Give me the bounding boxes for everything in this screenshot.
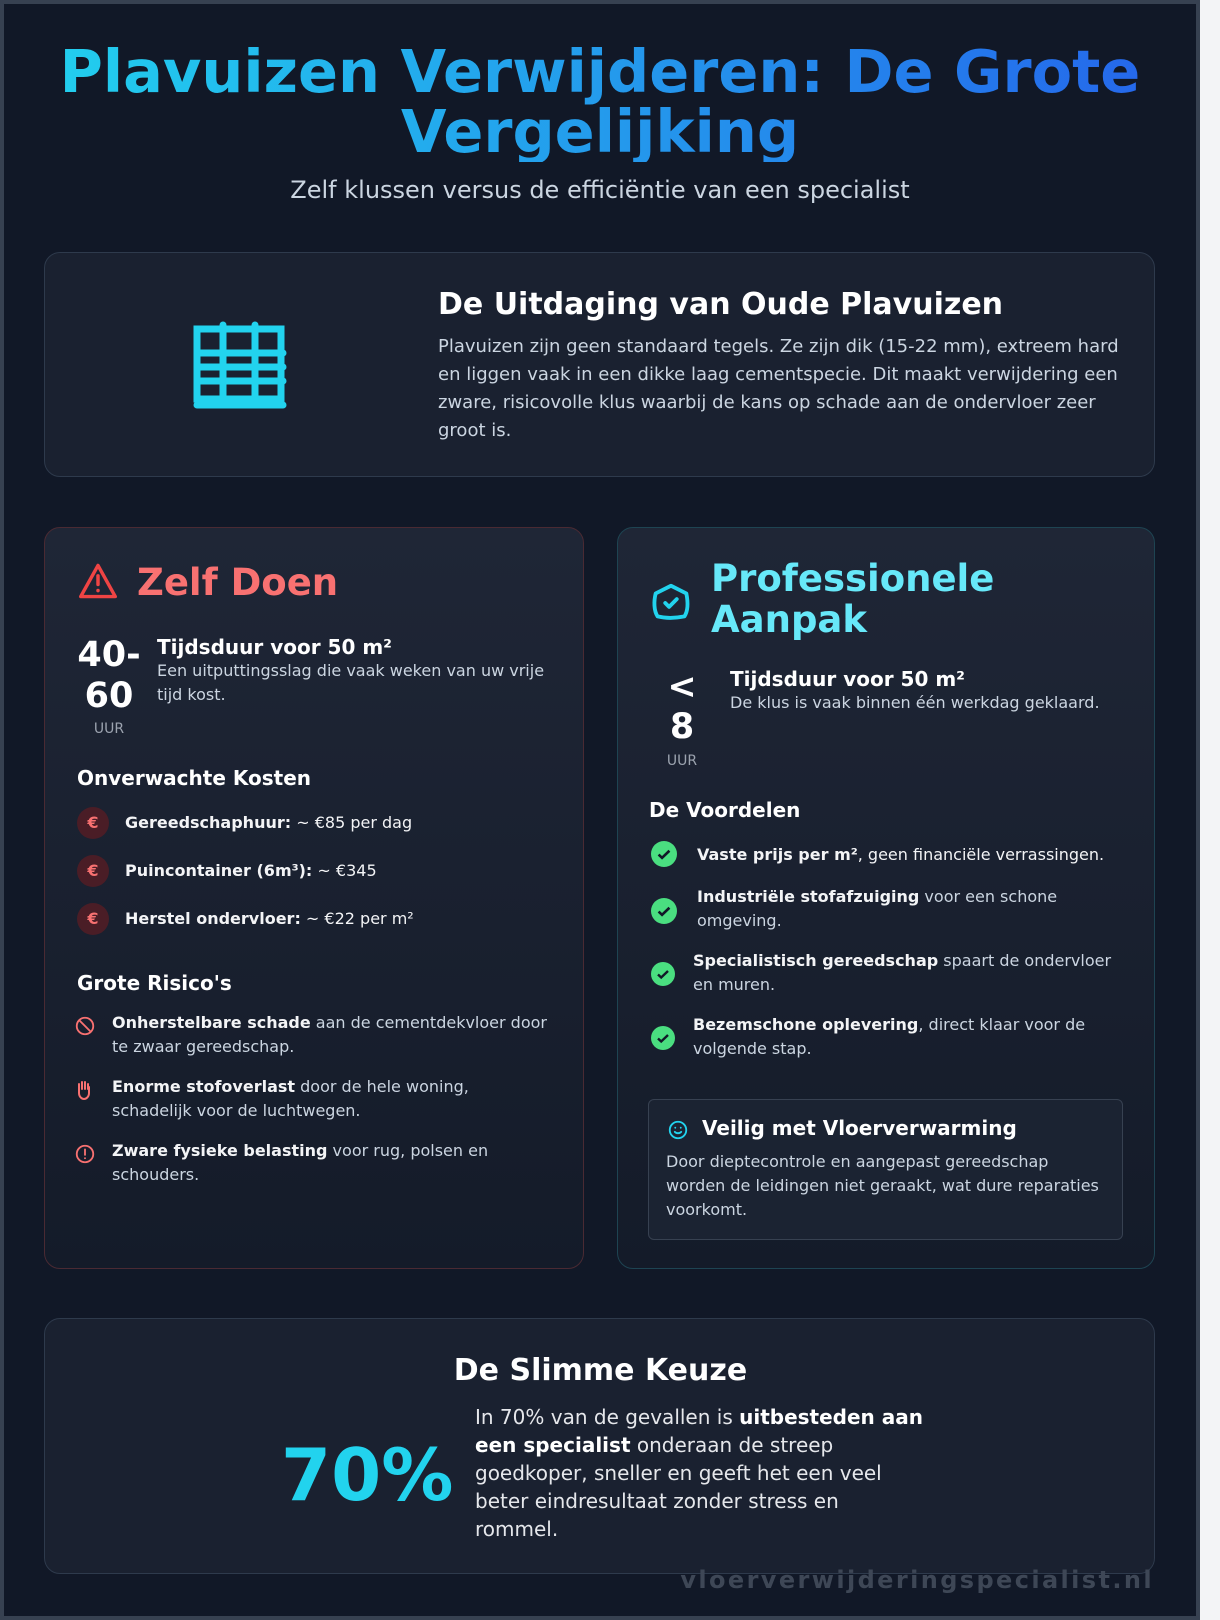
heading: intro: De Uitdaging van Oude Plavuizen <box>438 287 1003 322</box>
list: kosten: € <box>87 813 99 832</box>
subtitle: Zelf klussen versus de efficiëntie van een specialist <box>290 176 910 204</box>
text: intro: Plavuizen zijn geen standaard tegels. Ze zijn dik (15-22 mm), extreem hard en liggen vaak in een dikke laag cementspecie. Dit maakt verwijdering een zware, risicovolle klus waarbij de kans op schade aan de ondervloer zeer groot is. <box>438 336 1119 441</box>
panel: zelf doen <box>44 527 584 1269</box>
heading: professioneel: Professionele <box>711 557 994 600</box>
icon: warning <box>79 564 118 598</box>
title: Vergelijking <box>401 97 799 166</box>
list: voordelen: Specialistisch gereedschap spaart de ondervloer en muren. <box>693 951 1111 994</box>
stat: 40-60 uur <box>77 635 141 737</box>
panel: intro <box>44 252 1155 477</box>
panel: professioneel <box>617 527 1155 1269</box>
text: tijdsduur: Een uitputtingsslag die vaak weken van uw vrije tijd kost. <box>157 661 544 704</box>
list: kosten: Gereedschaphuur: ~ €85 per dag <box>125 813 412 832</box>
stat: <8 uur: < <box>667 667 697 707</box>
title <box>4 42 1196 162</box>
list: voordelen: Bezemschone oplevering, direct klaar voor de volgende stap. <box>693 1015 1085 1058</box>
icon: shield check <box>652 584 690 620</box>
heading: slimme keuze: De Slimme Keuze <box>454 1353 747 1388</box>
list: kosten <box>77 807 414 935</box>
callout: vloerverwarming <box>648 1099 1123 1240</box>
list: risico's: Zware fysieke belasting voor rug, polsen en schouders. <box>112 1141 488 1184</box>
heading: professioneel <box>711 557 994 641</box>
list: voordelen <box>651 841 1112 1058</box>
stat: <8 uur <box>667 667 697 769</box>
text: tijdsduur: Tijdsduur voor 50 m² <box>157 635 392 659</box>
icon: smile <box>668 1120 688 1140</box>
text: conclusie: rommel. <box>475 1517 558 1541</box>
list: risico's: Enorme stofoverlast door de hele woning, schadelijk voor de luchtwegen. <box>112 1077 469 1120</box>
text: tijdsduur <box>730 667 1100 712</box>
list: kosten: Puincontainer (6m³): ~ €345 <box>125 861 377 880</box>
list: voordelen: Vaste prijs per m², geen financiële verrassingen. <box>697 845 1104 864</box>
heading: voordelen: De Voordelen <box>649 798 800 822</box>
stat: <8 uur: 8 <box>670 707 694 747</box>
text: tijdsduur: Tijdsduur voor 50 m² <box>730 667 965 691</box>
callout: vloerverwarming: Veilig met Vloerverwarming <box>702 1116 1017 1140</box>
icon: tiles <box>194 322 286 408</box>
list: risico's <box>76 1013 547 1184</box>
list: voordelen: Industriële stofafzuiging voor een schone omgeving. <box>697 887 1057 930</box>
panel: slimme keuze <box>44 1318 1155 1574</box>
stat: <8 uur: UUR <box>667 753 697 769</box>
list: kosten: Herstel ondervloer: ~ €22 per m² <box>125 909 414 928</box>
stat: 70%: 70% <box>281 1433 453 1517</box>
heading: professioneel: Aanpak <box>711 598 867 641</box>
title: Plavuizen Verwijderen: De Grote <box>60 37 1140 106</box>
text: tijdsduur: De klus is vaak binnen één werkdag geklaard. <box>730 693 1100 712</box>
callout: vloerverwarming: Door dieptecontrole en aangepast gereedschap worden de leidingen niet geraakt, wat dure reparaties voorkomt. <box>666 1152 1099 1219</box>
text: tijdsduur <box>157 635 544 704</box>
list: kosten: € <box>87 861 99 880</box>
text: conclusie: In 70% van de gevallen is uitbesteden aan een specialist onderaan de streep goedkoper, sneller en geeft het een veel beter eindresultaat zonder stress en <box>475 1405 923 1513</box>
stat: 40-60 uur: UUR <box>94 721 124 737</box>
heading: zelf doen: Zelf Doen <box>137 561 338 604</box>
list: risico's: Onherstelbare schade aan de cementdekvloer door te zwaar gereedschap. <box>112 1013 547 1056</box>
heading: kosten: Onverwachte Kosten <box>77 766 311 790</box>
footer: website: vloerverwijderingspecialist.nl <box>680 1566 1154 1594</box>
heading: risico's: Grote Risico's <box>77 971 232 995</box>
list: kosten: € <box>87 909 99 928</box>
stat: 40-60 uur: 60 <box>85 676 133 716</box>
stat: 40-60 uur: 40- <box>77 635 141 675</box>
